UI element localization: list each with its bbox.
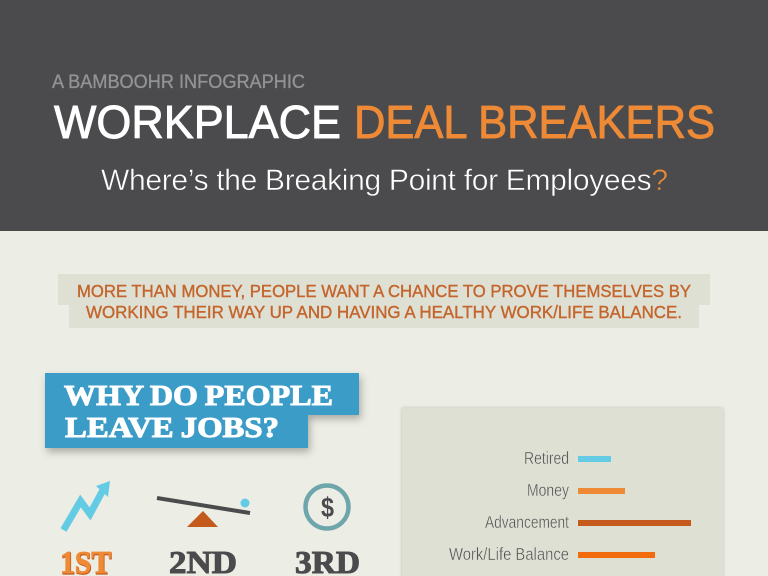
- heading line 2: LEAVE JOBS?: [65, 412, 279, 444]
- bar row: money: [527, 480, 625, 500]
- heading line 1: WHY DO PEOPLE: [64, 380, 333, 412]
- intro callout: [58, 274, 710, 328]
- bar row: retired: [524, 448, 611, 468]
- panel: bar chart: [402, 408, 723, 576]
- bar row: retired: Retired: [524, 448, 569, 468]
- title: white part: WORKPLACE: [54, 96, 341, 148]
- intro text line 2: WORKING THEIR WAY UP AND HAVING A HEALTHY WORK/LIFE BALANCE.: [86, 302, 682, 322]
- icon: rising arrow: [64, 481, 110, 530]
- header panel: [0, 0, 768, 231]
- icon: dollar coin: $: [321, 492, 334, 523]
- section heading banner: [45, 373, 359, 448]
- intro text line 1: MORE THAN MONEY, PEOPLE WANT A CHANCE TO PROVE THEMSELVES BY: [77, 281, 691, 301]
- bar row: advancement: Advancement: [485, 512, 569, 532]
- icon: seesaw: [157, 498, 250, 527]
- bar row: work/life balance: [449, 544, 655, 564]
- subtitle: Where’s the Breaking Point for Employees?: [101, 164, 668, 197]
- bar row: money: Money: [527, 480, 569, 500]
- eyebrow text: A BAMBOOHR INFOGRAPHIC: [52, 71, 305, 93]
- bar row: work/life balance: Work/Life Balance: [449, 544, 569, 564]
- title: orange part: DEAL BREAKERS: [354, 96, 715, 148]
- icon: dollar coin: [306, 486, 348, 528]
- bar row: advancement: [485, 512, 691, 532]
